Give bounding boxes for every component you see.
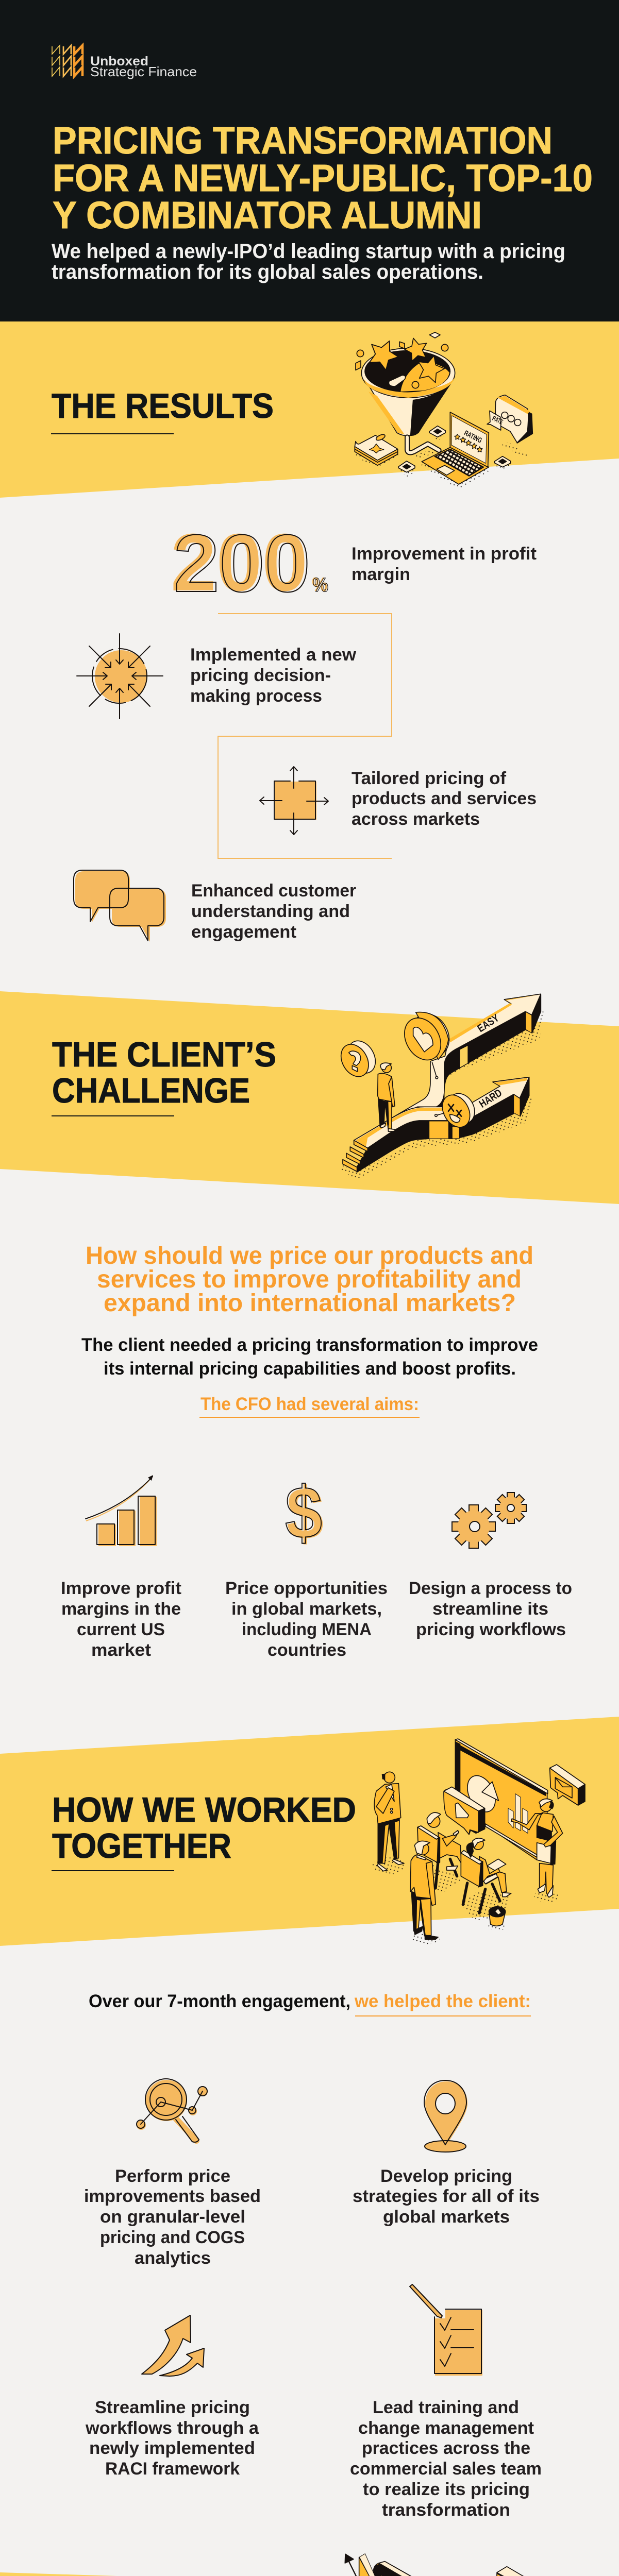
panel: client challenge band — [0, 991, 619, 1204]
icon: checklist with pencil — [410, 2284, 482, 2376]
title: Y COMBINATOR ALUMNI — [53, 194, 482, 236]
person standing left — [374, 1772, 404, 1871]
question heading: expand into international markets? — [104, 1290, 516, 1317]
small tiles — [398, 426, 511, 472]
aim: improve margins — [61, 1475, 181, 1660]
notepad — [355, 433, 398, 465]
aim: streamline workflows — [409, 1493, 572, 1639]
text: improve profit margins: margins in the — [61, 1599, 181, 1619]
text: lead training: transformation — [382, 2500, 510, 2520]
question heading — [86, 1242, 533, 1317]
text: design a process: pricing workflows — [416, 1620, 566, 1639]
text: lead training: change management — [358, 2418, 534, 2438]
heading: how we worked together: TOGETHER — [52, 1826, 231, 1866]
icon: location pin — [424, 2080, 467, 2152]
client needs statement: The client needed a pricing transformation to improve — [81, 1335, 538, 1355]
subtitle: We helped a newly-IPO’d leading startup with a pricing — [52, 240, 565, 263]
text: streamline pricing — [85, 2398, 259, 2479]
question heading: services to improve profitability and — [97, 1266, 522, 1293]
seated man — [417, 1812, 461, 1888]
standing man front — [410, 1841, 438, 1939]
title: FOR A NEWLY-PUBLIC, TOP-10 — [53, 157, 593, 199]
logo: Unboxed Strategic Finance: Unboxed — [90, 54, 148, 69]
text: tailored pricing: Tailored pricing of — [352, 769, 507, 788]
panel: results band — [0, 321, 619, 498]
text: price opportunities: countries — [267, 1640, 346, 1660]
text: tailored pricing — [352, 769, 537, 829]
upper arrow easy — [392, 994, 541, 1118]
heading: the client's challenge: CHALLENGE — [52, 1071, 250, 1110]
icon: rising arrows — [142, 2315, 204, 2376]
lower arrow hard — [354, 1077, 529, 1172]
text: perform price improvements: on granular-level — [100, 2207, 245, 2227]
text: tailored pricing: across markets — [352, 809, 480, 829]
illustration: funnel, laptop, ratings — [354, 332, 532, 489]
illustration: easy and hard road — [336, 994, 544, 1180]
laptop — [422, 412, 489, 484]
monitor body — [374, 2562, 523, 2576]
text: improvement: Improvement in profit — [352, 544, 537, 564]
engagement sentence: Over our 7-month engagement, — [89, 1991, 350, 2011]
heading: the results: THE RESULTS — [52, 386, 274, 426]
number: 200%: % — [312, 574, 327, 596]
icon: dollar sign: $ — [287, 1473, 324, 1555]
lower arrow hard: HARD — [477, 1087, 504, 1110]
text: improvement: margin — [352, 565, 410, 584]
text: perform price improvements: analytics — [135, 2248, 211, 2268]
seated woman — [461, 1838, 511, 1913]
text: price opportunities: in global markets, — [231, 1599, 382, 1619]
text: price opportunities — [225, 1579, 388, 1660]
text: develop pricing strategies: strategies for all of its — [353, 2187, 540, 2206]
text: lead training: practices across the — [362, 2438, 530, 2458]
text: implemented process — [190, 645, 357, 706]
text: develop pricing strategies: global markets — [383, 2207, 510, 2227]
stat: 200 percent improvement — [171, 517, 537, 609]
play bubble — [444, 1787, 485, 1835]
text: price opportunities: including MENA — [242, 1620, 372, 1639]
step: training and change management — [350, 2284, 542, 2520]
text: design a process: Design a process to — [409, 1579, 572, 1598]
text: enhanced customer: engagement — [191, 922, 296, 942]
mail bubble — [550, 1765, 585, 1805]
text: enhanced customer: understanding and — [191, 902, 350, 921]
text: improve profit margins: current US — [77, 1620, 165, 1639]
client needs statement: its internal pricing capabilities and boost profits. — [104, 1359, 516, 1379]
rate tag: RATE — [491, 415, 504, 426]
heading: the client's challenge — [52, 1035, 276, 1116]
aim: global opportunities — [225, 1472, 388, 1660]
text: improvement — [352, 544, 537, 584]
text: streamline pricing: workflows through a — [85, 2418, 259, 2438]
text: design a process: streamline its — [432, 1599, 548, 1619]
illustration: monitor with charts — [345, 2554, 562, 2576]
logo: Unboxed Strategic Finance — [52, 45, 197, 79]
heading: how we worked together: HOW WE WORKED — [52, 1790, 356, 1829]
text: streamline pricing: newly implemented — [89, 2438, 255, 2458]
text: develop pricing strategies: Develop pricing — [380, 2166, 512, 2186]
engagement sentence — [89, 1991, 531, 2016]
chat bubble — [495, 395, 532, 443]
pipe — [407, 437, 439, 453]
bar panel — [497, 2567, 562, 2576]
question heading: How should we price our products and — [86, 1242, 533, 1269]
illustration: team meeting — [373, 1739, 585, 1944]
title: PRICING TRANSFORMATION — [53, 119, 553, 162]
presenter — [511, 1799, 563, 1897]
text: improve profit margins: Improve profit — [61, 1579, 181, 1598]
text: enhanced customer — [191, 881, 356, 942]
text: perform price improvements: improvements based — [84, 2187, 261, 2206]
icon: magnifier with nodes — [137, 2079, 208, 2142]
icon: chat bubbles — [74, 870, 166, 942]
text: implemented process: Implemented a new — [190, 645, 357, 665]
icon: bar chart with arrow — [86, 1475, 157, 1546]
text: streamline pricing: RACI framework — [105, 2459, 240, 2479]
icon: expanding arrows — [260, 767, 328, 835]
disc: face — [435, 1089, 480, 1132]
text: implemented process: pricing decision- — [190, 666, 331, 685]
heading: how we worked together — [52, 1790, 356, 1871]
text: price opportunities: Price opportunities — [225, 1579, 388, 1598]
panel: how we worked band — [0, 1717, 619, 1946]
icon: converging arrows — [77, 634, 163, 719]
text: lead training: Lead training and — [373, 2398, 519, 2417]
person — [378, 1063, 396, 1131]
step: pricing strategies — [353, 2080, 540, 2227]
logo: Unboxed Strategic Finance: Strategic Finance — [90, 64, 197, 79]
upper arrow easy: EASY — [475, 1011, 501, 1035]
subtitle: transformation for its global sales operations. — [52, 261, 483, 283]
text: implemented process: making process — [190, 686, 322, 706]
text: tailored pricing: products and services — [352, 789, 537, 808]
icon: gears — [452, 1493, 526, 1548]
number: 200%: % — [313, 574, 328, 596]
step: price improvements — [84, 2079, 261, 2268]
step: streamline workflows — [85, 2315, 259, 2479]
rate tag — [487, 411, 504, 430]
text: develop pricing strategies — [353, 2166, 540, 2227]
client needs statement — [81, 1335, 538, 1379]
presentation board — [455, 1739, 548, 1862]
text: enhanced customer: Enhanced customer — [191, 881, 356, 901]
zigzag arrow — [345, 2554, 462, 2576]
text: perform price improvements: pricing and COGS — [100, 2228, 245, 2247]
number: 200%: 200 — [171, 517, 308, 608]
heading: the client's challenge: THE CLIENT’S — [52, 1035, 276, 1074]
title — [53, 119, 593, 236]
text: lead training: commercial sales team — [350, 2459, 542, 2479]
panel: impact band — [0, 2572, 619, 2576]
sub-heading: CFO aims: The CFO had several aims: — [200, 1394, 419, 1414]
text: perform price improvements — [84, 2166, 261, 2268]
stairs — [343, 1140, 370, 1172]
connector line — [218, 614, 392, 858]
disc: heart — [397, 1007, 457, 1079]
text: lead training: to realize its pricing — [363, 2480, 530, 2499]
icon: dollar sign: $ — [285, 1472, 322, 1554]
text: lead training — [350, 2398, 542, 2520]
number: 200%: 200 — [174, 518, 310, 609]
text: improve profit margins: market — [91, 1640, 151, 1660]
panel: header — [0, 0, 619, 321]
subtitle — [52, 240, 565, 283]
text: design a process — [409, 1579, 572, 1639]
text: perform price improvements: Perform price — [115, 2166, 230, 2186]
engagement sentence: we helped the client: — [354, 1991, 531, 2011]
disc: question mark — [336, 1036, 381, 1081]
funnel — [356, 332, 455, 436]
text: improve profit margins — [61, 1579, 181, 1660]
waste bin — [489, 1907, 506, 1926]
laptop: RATING — [463, 429, 483, 445]
text: streamline pricing: Streamline pricing — [95, 2398, 250, 2417]
